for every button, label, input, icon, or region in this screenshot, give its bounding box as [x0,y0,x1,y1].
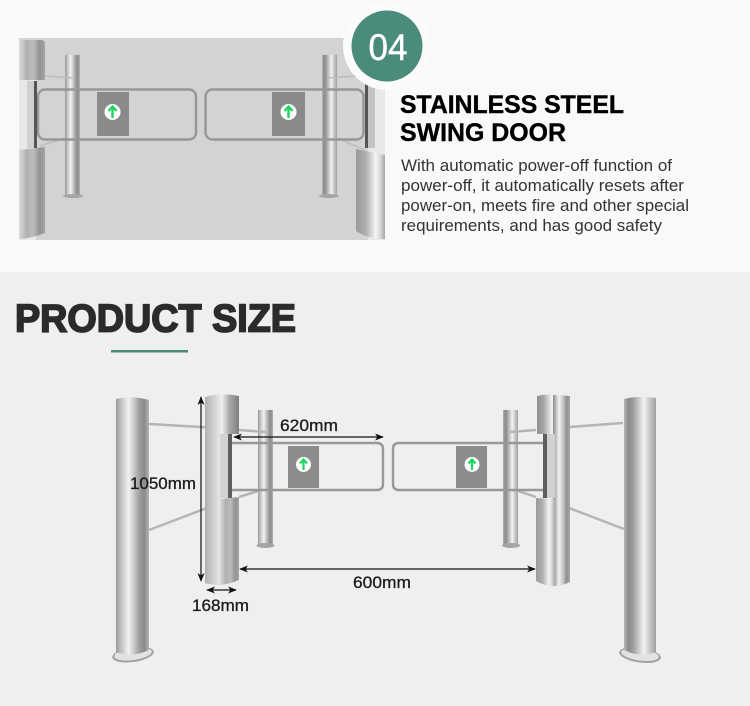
product diagram: swing gate [111,394,662,665]
left gate frame [38,90,196,140]
outer right post [618,397,662,665]
dimension: 1050mm: 1050mm [130,474,196,493]
body text: power-off, it automatically resets after [401,177,685,195]
right rear post [319,55,339,198]
top section background [0,0,750,272]
dimension: 168mm: 168mm [192,596,249,615]
left gate [232,443,383,490]
body text: requirements, and has good safety [401,217,663,235]
left main post [19,40,45,240]
left rear post [63,55,83,198]
right main post [356,60,385,240]
heading: stainless steel swing door: SWING DOOR [400,119,566,147]
body text [401,157,689,235]
right gate frame [206,90,364,140]
heading underline [111,350,188,352]
braces [149,423,624,530]
heading: stainless steel swing door [400,91,624,147]
body text: power-on, meets fire and other special [401,197,689,215]
inner right post [536,395,570,586]
number badge [343,2,431,90]
lower section background [0,272,750,706]
side braces [40,76,365,150]
panel: swing door photo [19,38,385,240]
right gate [393,443,543,490]
heading: stainless steel swing door: STAINLESS STEEL [400,91,624,119]
outer left post [111,397,155,665]
number badge: 04 [368,27,408,68]
dimension: 600mm: 600mm [353,573,411,592]
rear posts [256,410,520,548]
heading: product size: PRODUCT SIZE [15,298,296,340]
dimension: 620mm: 620mm [280,416,338,435]
body text: With automatic power-off function of [401,157,672,175]
inner left post [205,394,239,585]
